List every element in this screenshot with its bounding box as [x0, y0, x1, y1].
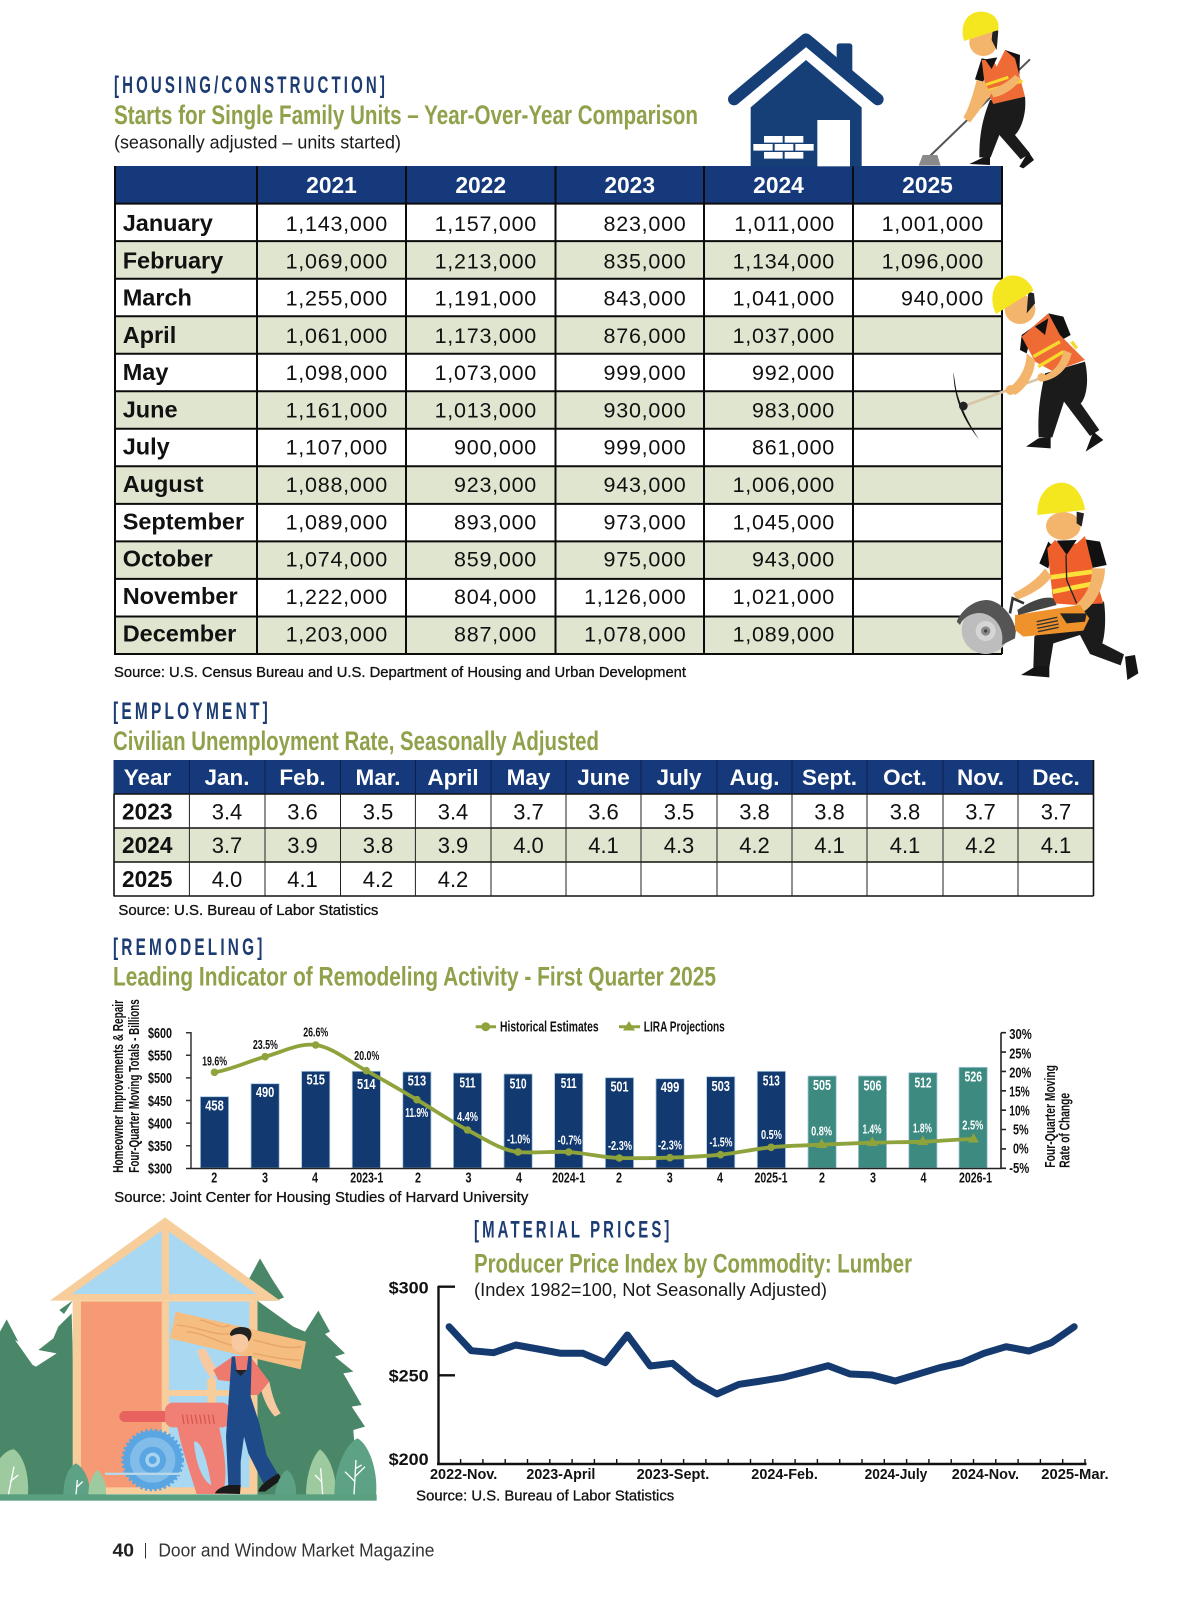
bar value labels: 514 [357, 1076, 376, 1093]
chart: lumber price index: 2022-Nov. [430, 1467, 497, 1483]
table: unemployment rate: 4.1 [890, 833, 920, 858]
saw [105, 1403, 230, 1494]
bar value labels: 506 [864, 1078, 882, 1095]
percent labels: -2.3% [608, 1138, 632, 1153]
bar value labels: 458 [205, 1098, 224, 1115]
panel: employment [113, 698, 1094, 919]
table: unemployment rate: 2024 [122, 832, 173, 858]
legend: LIRA Projections [644, 1020, 725, 1036]
table: unemployment rate: 3.7 [1041, 800, 1071, 824]
chart: lumber price index: 2024-Feb. [751, 1467, 818, 1483]
bar value labels: 526 [965, 1069, 982, 1086]
right axis title: Rate of Change [1058, 1093, 1074, 1168]
table: unemployment rate: 4.2 [739, 833, 770, 858]
table: housing starts: 1,191,000 [435, 287, 537, 311]
table: housing starts: 1,107,000 [286, 435, 388, 459]
x axis labels: 2 [819, 1170, 825, 1186]
right axis labels: 10% [1009, 1102, 1030, 1119]
table: unemployment rate [114, 760, 1094, 896]
left axis labels: $500 [148, 1070, 172, 1087]
chart: lumber price index: $300 [389, 1278, 429, 1297]
table: unemployment rate: Year [124, 765, 172, 790]
table: unemployment rate: 4.1 [814, 833, 845, 858]
table: unemployment rate: 3.4 [438, 800, 468, 824]
illustration: carpenter and house [0, 1217, 377, 1501]
chart: lumber price index: 2025-Mar. [1041, 1467, 1109, 1483]
table: unemployment rate: Oct. [883, 765, 927, 790]
percent labels: -1.0% [507, 1132, 530, 1147]
right axis labels: 5% [1013, 1121, 1029, 1138]
bar value labels: 510 [510, 1076, 527, 1093]
table: housing starts: 1,126,000 [584, 585, 686, 609]
source: census: Source: U.S. Census Bureau and U.S. Department of Housing and Urban Development [114, 665, 686, 681]
table: housing starts: 859,000 [454, 548, 537, 572]
right axis title [1043, 1065, 1074, 1168]
percent labels: 2.5% [962, 1117, 984, 1132]
table: housing starts: 1,213,000 [435, 249, 537, 273]
x axis labels [211, 1170, 992, 1186]
right axis labels: 15% [1009, 1083, 1030, 1100]
x axis labels: 2026-1 [959, 1170, 992, 1186]
table: unemployment rate: 3.7 [513, 800, 544, 824]
heading: housing construction: [HOUSING/CONSTRUCTION] [114, 72, 388, 99]
table: housing starts: 943,000 [752, 548, 835, 572]
right axis labels: -5% [1009, 1160, 1029, 1177]
table: housing starts: 1,157,000 [435, 212, 537, 236]
table: housing starts: 999,000 [604, 435, 686, 459]
table: housing starts: 1,021,000 [733, 585, 835, 609]
table: housing starts: 973,000 [604, 510, 686, 534]
heading: material prices: [MATERIAL PRICES] [474, 1217, 672, 1244]
table: unemployment rate: 3.8 [814, 800, 845, 824]
table: housing starts: 1,006,000 [733, 473, 835, 497]
left axis labels: $600 [148, 1025, 172, 1042]
table: housing starts: March [123, 285, 192, 311]
percent labels: 1.8% [913, 1121, 932, 1136]
table: unemployment rate: 3.8 [890, 800, 920, 824]
icon: worker with pickaxe [953, 276, 1103, 452]
table: housing starts: 1,161,000 [286, 398, 388, 422]
table: unemployment rate: 2023 [122, 798, 172, 824]
table: unemployment rate: 4.1 [287, 867, 318, 892]
table: unemployment rate: 3.8 [363, 833, 393, 858]
percent labels [202, 1025, 984, 1153]
bar value labels [205, 1069, 982, 1115]
left axis labels: $300 [148, 1161, 172, 1178]
table: housing starts: 887,000 [454, 622, 537, 646]
x axis labels: 2023-1 [350, 1170, 383, 1186]
x axis labels: 2 [211, 1170, 217, 1186]
table: unemployment rate: 3.7 [965, 800, 996, 824]
x axis labels: 3 [870, 1170, 876, 1186]
table: unemployment rate: 3.4 [212, 800, 242, 824]
table: housing starts: 835,000 [604, 249, 686, 273]
footer: 40 [112, 1540, 134, 1560]
table: unemployment rate: April [427, 765, 479, 790]
table: housing starts: October [123, 546, 213, 572]
left axis title [111, 999, 143, 1173]
title: producer price index: Producer Price Index by Commodity: Lumber [474, 1249, 912, 1279]
bar value labels: 513 [763, 1072, 780, 1089]
table: housing starts: May [123, 359, 168, 385]
table: unemployment rate: 3.9 [438, 833, 468, 858]
table: housing starts: 1,069,000 [286, 249, 388, 273]
heading: employment: [EMPLOYMENT] [113, 698, 271, 725]
table: unemployment rate: 3.5 [363, 800, 393, 824]
table: unemployment rate: May [507, 765, 551, 790]
percent labels: 19.6% [202, 1053, 227, 1068]
table: unemployment rate: Jan. [204, 765, 250, 790]
bar value labels: 501 [610, 1079, 628, 1096]
left axis title: Four-Quarter Moving Totals - Billions [127, 999, 143, 1173]
subtitle: seasonally adjusted: (seasonally adjusted – units started) [114, 131, 401, 152]
right axis labels: 20% [1009, 1064, 1031, 1081]
table: housing starts: 1,041,000 [733, 287, 835, 311]
table: unemployment rate: 3.9 [287, 833, 318, 858]
table: housing starts: 1,037,000 [733, 324, 835, 348]
table: unemployment rate: Aug. [730, 765, 780, 790]
title: civilian unemployment rate: Civilian Unemployment Rate, Seasonally Adjusted [113, 726, 599, 756]
table: housing starts: 823,000 [604, 212, 686, 236]
table: housing starts: 1,073,000 [435, 361, 537, 385]
chart: lumber price index: 2023-Sept. [637, 1467, 709, 1483]
subtitle: index 1982: (Index 1982=100, Not Seasonally Adjusted) [474, 1279, 827, 1300]
lumber [170, 1312, 306, 1369]
source: bureau of labor statistics: Source: U.S. Bureau of Labor Statistics [118, 903, 378, 919]
table: housing starts: 1,011,000 [734, 212, 835, 236]
percent labels: -0.7% [558, 1133, 582, 1148]
chart: lumber price index: 2024-July [865, 1467, 927, 1483]
x axis labels: 4 [920, 1170, 926, 1186]
x axis labels: 2 [616, 1170, 622, 1186]
table: unemployment rate: 4.3 [664, 833, 694, 858]
table: unemployment rate: July [656, 765, 702, 790]
title: starts for single family units: Starts for Single Family Units – Year-Over-Year Comparison [114, 100, 698, 130]
table: housing starts: 804,000 [454, 585, 537, 609]
x axis labels: 4 [717, 1170, 723, 1186]
table: housing starts: 1,173,000 [435, 324, 537, 348]
panel: housing construction [114, 72, 1002, 681]
bar value labels: 515 [306, 1072, 325, 1089]
table: unemployment rate: 4.2 [363, 867, 393, 892]
table: housing starts: 893,000 [454, 510, 537, 534]
trend line [211, 1041, 979, 1162]
source: joint center: Source: Joint Center for Housing Studies of Harvard University [114, 1190, 529, 1206]
table: unemployment rate: Nov. [957, 765, 1004, 790]
source: bureau of labor statistics: Source: U.S. Bureau of Labor Statistics [416, 1488, 674, 1504]
table: housing starts: February [123, 247, 223, 273]
table: unemployment rate: 2025 [122, 866, 172, 892]
table: housing starts: 999,000 [604, 361, 686, 385]
icon: house [734, 39, 878, 166]
table: unemployment rate: 4.2 [965, 833, 996, 858]
panel: material prices [389, 1217, 1109, 1504]
table: housing starts: 1,255,000 [286, 287, 388, 311]
table: housing starts: September [123, 508, 244, 534]
percent labels: 23.5% [253, 1037, 278, 1052]
table: housing starts: December [123, 620, 236, 646]
legend [476, 1020, 725, 1036]
table: housing starts: 1,098,000 [286, 361, 388, 385]
table: unemployment rate: 4.1 [1041, 833, 1071, 858]
table: housing starts: 1,045,000 [733, 510, 835, 534]
table: housing starts: 1,143,000 [286, 212, 388, 236]
bushes [0, 1438, 377, 1501]
table: unemployment rate: 3.6 [588, 800, 619, 824]
table: housing starts: 1,134,000 [733, 249, 835, 273]
table: unemployment rate: June [577, 765, 630, 790]
x axis labels: 4 [516, 1170, 522, 1186]
x axis labels: 4 [312, 1170, 318, 1186]
chart: lumber price index: $250 [389, 1367, 429, 1386]
table: housing starts: 1,089,000 [286, 510, 388, 534]
chart: lumber price index: 2024-Nov. [952, 1467, 1019, 1483]
icon: worker with broom [919, 12, 1034, 168]
left axis labels [148, 1025, 172, 1178]
percent labels: 1.4% [862, 1121, 882, 1136]
table: housing starts: August [123, 471, 204, 497]
right axis labels [1009, 1026, 1032, 1177]
table: housing starts: 940,000 [901, 287, 984, 311]
bar value labels: 512 [914, 1074, 932, 1091]
bar value labels: 505 [813, 1077, 831, 1094]
heading: remodeling: [REMODELING] [113, 934, 266, 961]
table: unemployment rate: 4.0 [513, 833, 544, 858]
table: unemployment rate: Mar. [355, 765, 401, 790]
table: housing starts: 1,001,000 [882, 212, 984, 236]
left axis labels: $350 [148, 1138, 172, 1155]
left axis labels: $400 [148, 1115, 172, 1132]
table: unemployment rate: 3.5 [664, 800, 694, 824]
table: housing starts: January [123, 210, 213, 236]
table: unemployment rate: Feb. [279, 765, 326, 790]
table: housing starts: 2025 [902, 172, 953, 198]
table: housing starts: 876,000 [604, 324, 686, 348]
right axis labels: 0% [1013, 1141, 1029, 1158]
chart: lumber price index [389, 1278, 1109, 1483]
table: unemployment rate: 4.0 [212, 867, 242, 892]
table: housing starts: 2021 [306, 172, 357, 198]
table: housing starts: 930,000 [604, 398, 686, 422]
table: housing starts: 1,074,000 [286, 548, 388, 572]
table: housing starts: 1,096,000 [882, 249, 984, 273]
table: housing starts: 1,013,000 [435, 398, 537, 422]
percent labels: 20.0% [354, 1048, 380, 1063]
table: housing starts: April [123, 322, 176, 348]
right axis labels: 25% [1009, 1045, 1031, 1062]
x axis labels: 2 [415, 1170, 421, 1186]
table: housing starts: 983,000 [752, 398, 835, 422]
icon: worker with cut-off saw [957, 483, 1138, 680]
left axis title: Homeowner Improvements & Repair [111, 1000, 127, 1173]
table: housing starts: 1,061,000 [286, 324, 388, 348]
table: housing starts: 1,222,000 [286, 585, 388, 609]
percent labels: 4.4% [457, 1109, 478, 1124]
table: housing starts: 2022 [455, 172, 506, 198]
table: housing starts: July [123, 433, 170, 459]
legend: Historical Estimates [500, 1020, 599, 1036]
table: housing starts: 975,000 [604, 548, 686, 572]
right axis labels: 30% [1009, 1026, 1032, 1043]
table: unemployment rate: 3.7 [212, 833, 242, 858]
table: housing starts: 900,000 [454, 435, 537, 459]
chart: LIRA bars and line [111, 999, 1074, 1186]
table: housing starts: 943,000 [604, 473, 686, 497]
left axis labels: $550 [148, 1048, 172, 1065]
table: housing starts: 992,000 [752, 361, 835, 385]
table: housing starts: 861,000 [752, 435, 835, 459]
percent labels: 0.5% [761, 1127, 782, 1142]
x axis labels: 3 [667, 1170, 673, 1186]
percent labels: 0.8% [811, 1123, 832, 1138]
table: unemployment rate: 3.8 [739, 800, 770, 824]
x axis labels: 3 [262, 1170, 268, 1186]
carpenter [197, 1327, 282, 1494]
table: housing starts: 2023 [604, 172, 655, 198]
table: housing starts: November [123, 583, 238, 609]
table: unemployment rate: 3.6 [287, 800, 318, 824]
table: housing starts: 843,000 [604, 287, 686, 311]
x axis labels: 2025-1 [754, 1170, 788, 1186]
percent labels: 11.9% [405, 1105, 429, 1120]
bar value labels: 511 [561, 1075, 577, 1092]
bar value labels: 499 [661, 1079, 679, 1096]
percent labels: -1.5% [710, 1135, 733, 1150]
table: unemployment rate: 4.1 [588, 833, 619, 858]
x axis labels: 3 [466, 1170, 472, 1186]
chart: lumber price index: 2023-April [526, 1467, 595, 1483]
bar value labels: 513 [408, 1073, 426, 1090]
table: housing starts: 1,089,000 [733, 622, 835, 646]
left axis labels: $450 [148, 1093, 172, 1110]
table: housing starts: June [123, 396, 178, 422]
table: housing starts: 923,000 [454, 473, 537, 497]
table: unemployment rate: 4.2 [438, 867, 468, 892]
x axis labels: 2024-1 [552, 1170, 585, 1186]
panel: remodeling [111, 934, 1074, 1206]
table: housing starts: 2024 [753, 172, 804, 198]
bar value labels: 490 [256, 1084, 274, 1101]
bar value labels: 503 [711, 1078, 730, 1095]
table: unemployment rate: Dec. [1032, 765, 1080, 790]
table: housing starts: 1,078,000 [584, 622, 686, 646]
table: housing starts [114, 166, 1002, 654]
percent labels: 26.6% [303, 1025, 328, 1040]
percent labels: -2.3% [658, 1137, 682, 1152]
right axis title: Four-Quarter Moving [1043, 1065, 1059, 1168]
bars [200, 1067, 987, 1168]
table: unemployment rate: Sept. [802, 765, 857, 790]
bar value labels: 511 [460, 1074, 476, 1091]
table: housing starts: 1,088,000 [286, 473, 388, 497]
table: housing starts: 1,203,000 [286, 622, 388, 646]
chart: lumber price index: $200 [389, 1450, 429, 1469]
footer: Door and Window Market Magazine [158, 1540, 434, 1560]
title: leading indicator: Leading Indicator of Remodeling Activity - First Quarter 2025 [113, 962, 716, 992]
